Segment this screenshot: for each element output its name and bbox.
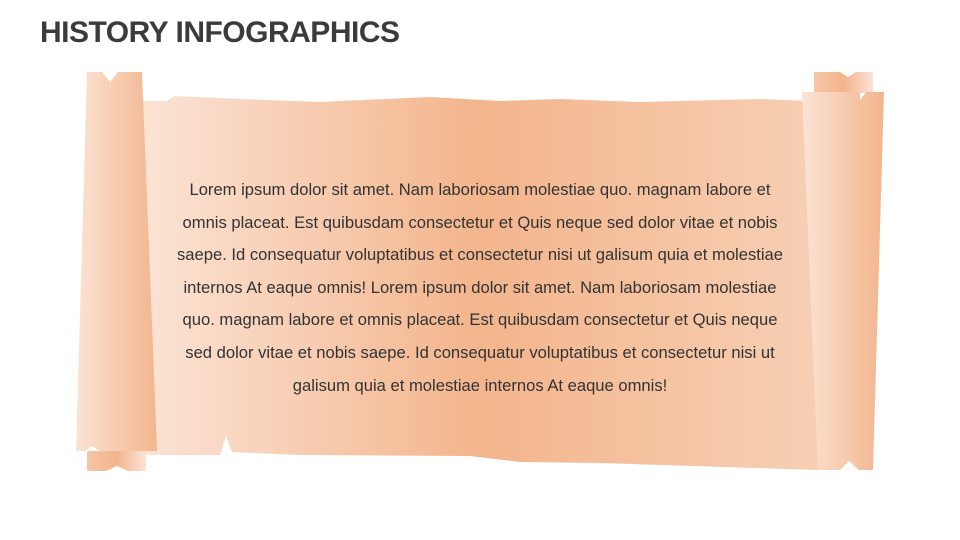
right roll bbox=[802, 92, 884, 470]
body text: sed dolor vitae et nobis saepe. Id consequatur voluptatibus et consectetur nisi ut bbox=[185, 343, 775, 362]
body text: galisum quia et molestiae internos At eaque omnis! bbox=[293, 376, 667, 395]
body text: internos At eaque omnis! Lorem ipsum dolor sit amet. Nam laboriosam molestiae bbox=[183, 278, 777, 297]
title: HISTORY INFOGRAPHICS bbox=[40, 16, 400, 49]
body text: omnis placeat. Est quibusdam consectetur et Quis neque sed dolor vitae et nobis bbox=[183, 213, 777, 232]
parchment bbox=[143, 96, 818, 470]
left roll back bbox=[87, 451, 146, 471]
right roll back bbox=[814, 72, 873, 93]
body text bbox=[177, 180, 783, 395]
left roll bbox=[76, 72, 157, 451]
body text: Lorem ipsum dolor sit amet. Nam laboriosam molestiae quo. magnam labore et bbox=[189, 180, 771, 199]
body text: quo. magnam labore et omnis placeat. Est quibusdam consectetur et Quis neque bbox=[183, 310, 777, 329]
body text: saepe. Id consequatur voluptatibus et consectetur nisi ut galisum quia et molestiae bbox=[177, 245, 783, 264]
